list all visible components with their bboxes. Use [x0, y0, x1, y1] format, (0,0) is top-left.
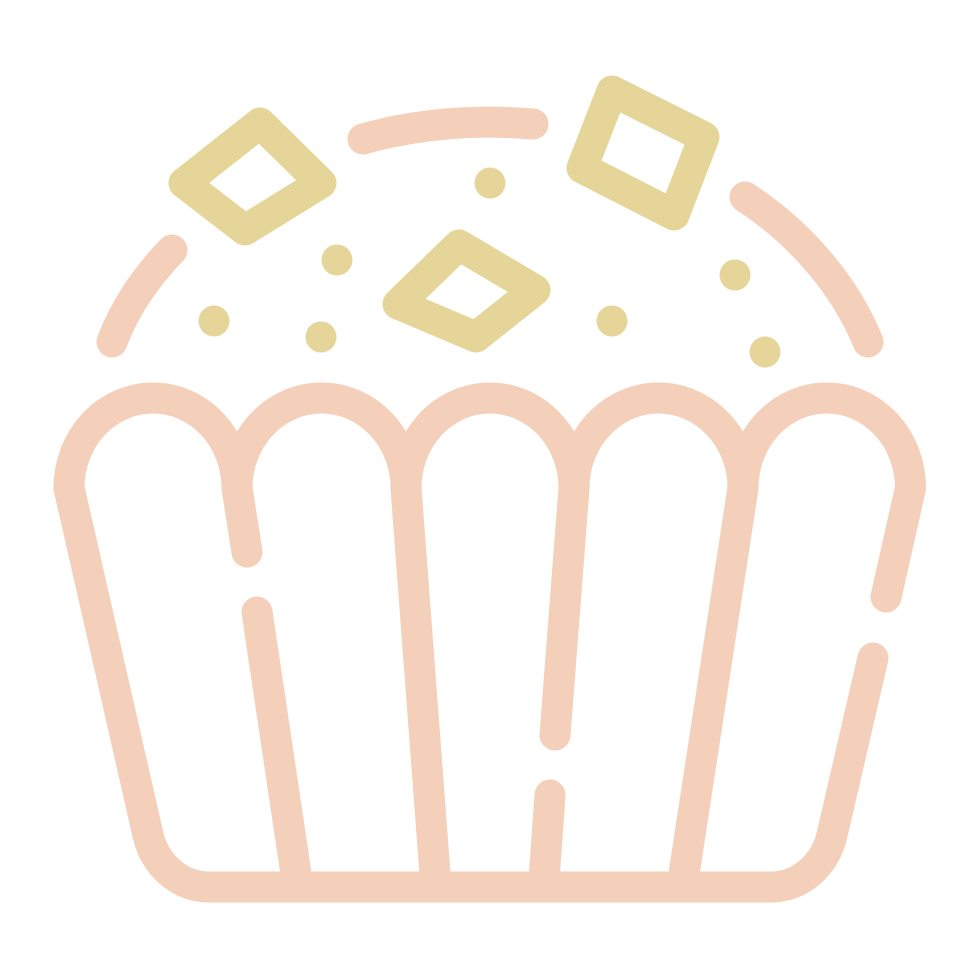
- muffin top crust: [112, 122, 868, 342]
- chocolate chunks: [184, 91, 704, 337]
- wrapper scalloped rim and outer sides: [69, 398, 910, 887]
- wrapper pleats: [237, 488, 247, 552]
- crumbs: [198, 168, 780, 368]
- cupcake wrapper: [69, 398, 910, 887]
